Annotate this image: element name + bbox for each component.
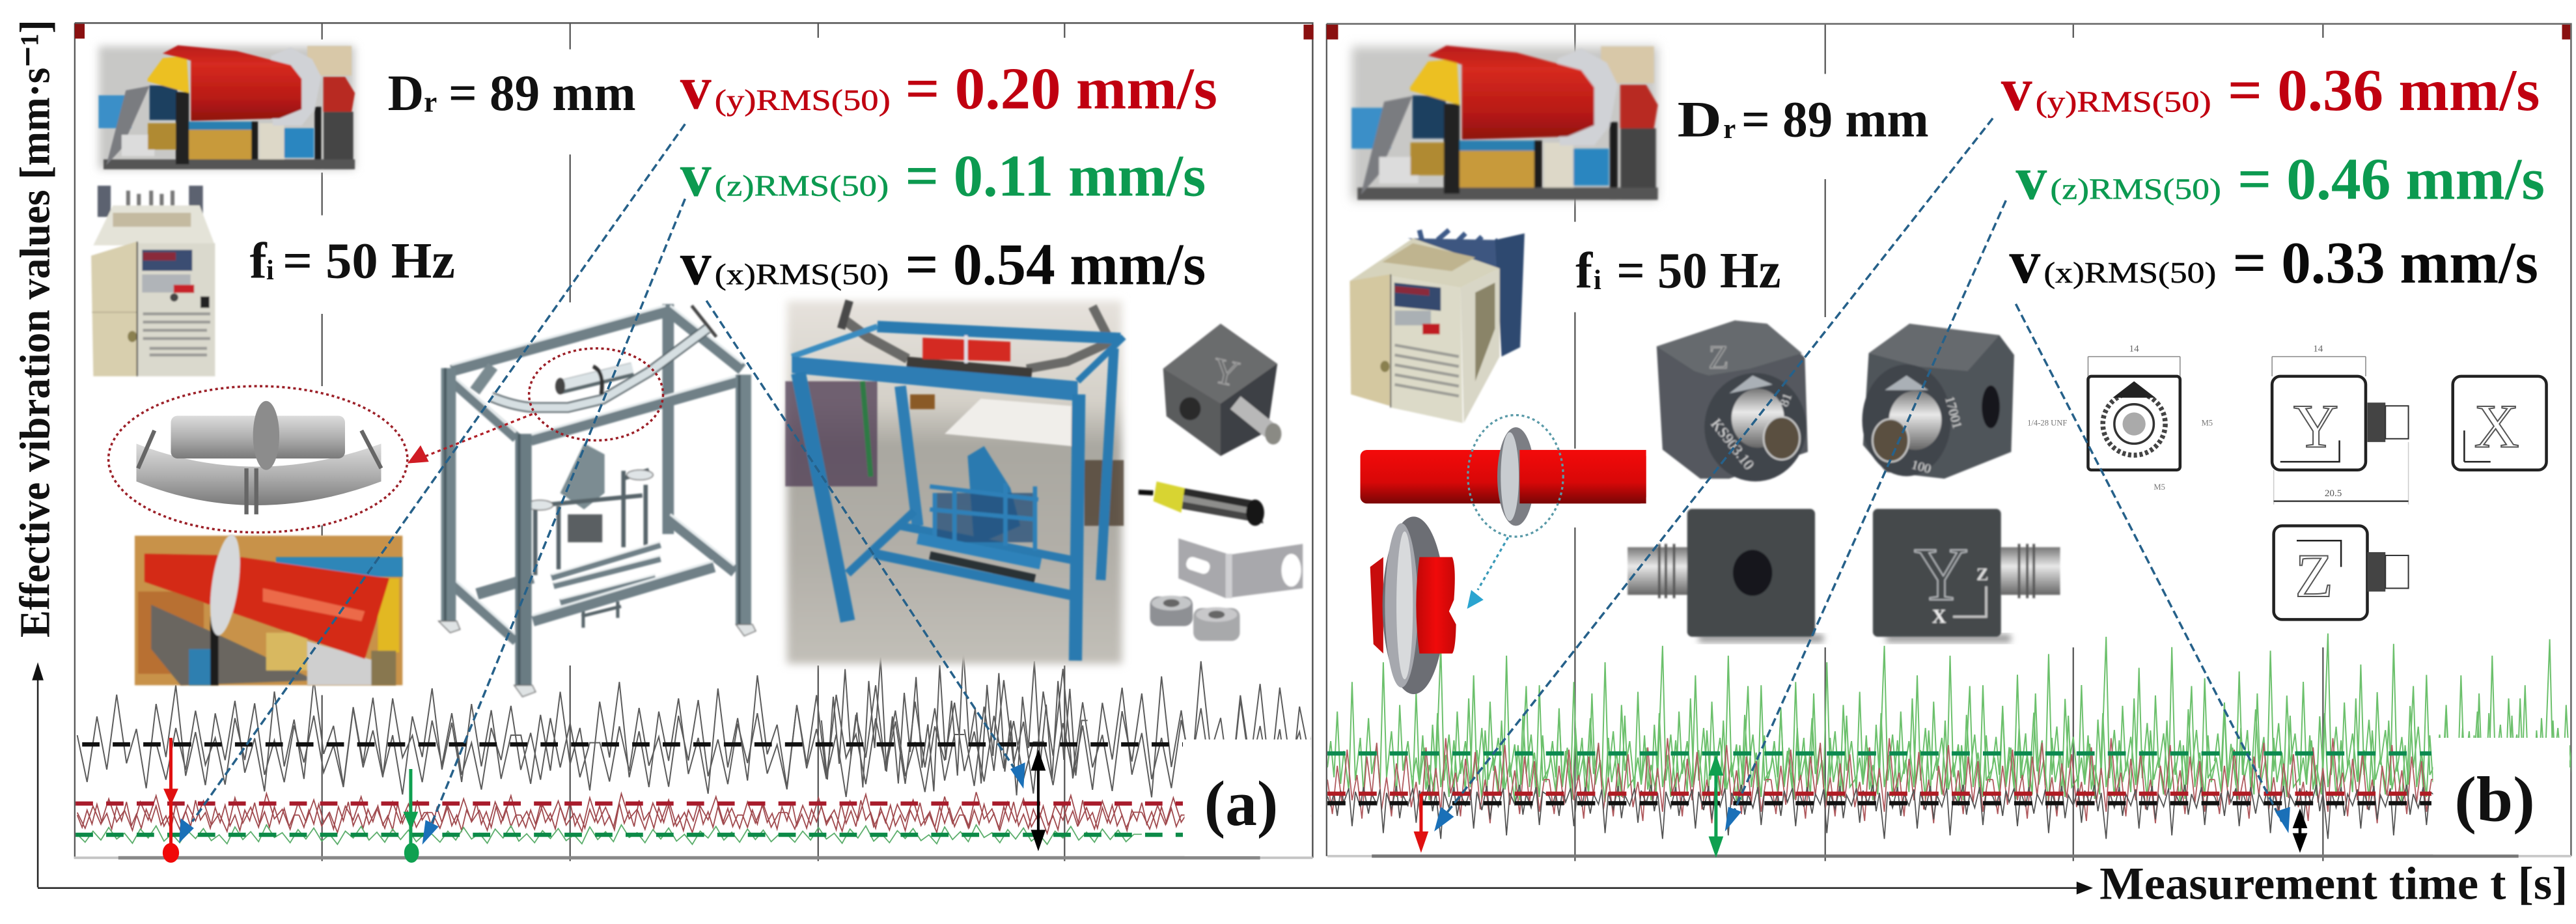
lower frame — [848, 511, 915, 574]
chart: vibration signals (a) — [77, 658, 1311, 845]
drawing: sensor connector view — [2027, 344, 2213, 492]
value: v(z) RMS (b): = 0.46 mm/s — [2237, 146, 2545, 212]
photo: roller close-up (a) — [135, 533, 402, 685]
y axis label: Effective vibration values [mm·s⁻¹] — [12, 20, 59, 637]
chart: vibration signals (b) — [1327, 634, 2576, 839]
corner mark — [75, 24, 85, 38]
label: inverter frequency (a): = 50 Hz — [283, 232, 455, 288]
value: v(z) RMS (a): v — [680, 140, 712, 209]
green marker arrow (a) — [404, 769, 419, 863]
photo: sensor cube left: Z — [1709, 339, 1728, 375]
icon: mounting bracket — [1178, 539, 1303, 598]
drawing: sensor connector view: 1/4-28 UNF — [2027, 419, 2067, 428]
drawing: Z side: Z — [2295, 541, 2333, 610]
panel: (b) — [1303, 24, 2576, 861]
red signal y — [1327, 738, 2436, 823]
leader lines (a) — [192, 124, 1017, 826]
red roller model — [1361, 427, 1646, 526]
dotted arrow to section — [1467, 537, 1508, 609]
leader arrowheads (b) — [1434, 807, 2290, 833]
value: v(y) RMS (a): (y)RMS(50) — [715, 84, 891, 117]
black double arrow (b) — [2293, 809, 2307, 853]
drawing: Y side: 20.5 — [2325, 488, 2342, 499]
drawing: X side: X — [2474, 391, 2519, 460]
rail highlights — [452, 305, 743, 565]
label: roller diameter (a): D — [388, 64, 424, 121]
arrow: zoom to idler model — [408, 414, 533, 464]
black signal x — [77, 658, 1311, 798]
value: v(y) RMS (a) — [680, 53, 1217, 122]
x axis arrow — [38, 882, 2093, 895]
label: inverter frequency (b): = 50 Hz — [1616, 242, 1781, 299]
icon: hex nuts — [1150, 596, 1240, 641]
value: v(z) RMS (b) — [2015, 143, 2545, 212]
value: v(y) RMS (b) — [2001, 55, 2540, 124]
photo: sensor face Y — [1873, 509, 2060, 643]
label: roller diameter (a): = 89 mm — [449, 64, 636, 121]
red marker arrow (a) — [163, 738, 179, 863]
machinery — [967, 446, 1020, 546]
drawing: sensor connector view: M5 — [2154, 483, 2165, 492]
label: inverter frequency (a): i — [266, 255, 274, 286]
value: v(y) RMS (b): v — [2001, 55, 2032, 124]
highlight ellipse with idler model — [109, 386, 408, 533]
red marker arrow (b) — [1414, 794, 1428, 853]
label: roller diameter (b): D — [1678, 91, 1722, 147]
value: v(x) RMS (b): (x)RMS(50) — [2043, 257, 2216, 289]
photo: sensor cube right — [1862, 324, 2014, 479]
icon: frequency inverter (a) — [91, 186, 215, 376]
label: inverter frequency (b): f — [1575, 242, 1593, 299]
mechanism — [561, 443, 605, 509]
drawing: sensor connector view: 14 — [2129, 344, 2139, 354]
leader arrowheads (a) — [179, 763, 1025, 845]
drawing: Y side: Y — [2293, 391, 2338, 460]
panel tag (a): (a) — [1204, 768, 1278, 839]
panel tag (b): (b) — [2454, 764, 2535, 835]
leader lines (b) — [1443, 119, 2282, 822]
front frame parts — [452, 380, 742, 641]
value: v(z) RMS (a): = 0.11 mm/s — [906, 143, 1206, 208]
photo: roller top-left (a) — [98, 46, 355, 169]
value: v(x) RMS (a) — [680, 229, 1206, 298]
green signal z — [77, 825, 1142, 845]
icon: triaxial sensor (a): Y — [1209, 351, 1243, 395]
drawing: Y side — [2272, 344, 2409, 505]
value: v(x) RMS (b): v — [2009, 227, 2040, 296]
value: v(y) RMS (b): = 0.36 mm/s — [2228, 57, 2540, 123]
background clutter — [785, 381, 878, 486]
x axis label: Measurement time t [s] — [2099, 858, 2568, 909]
photo: sensor cube left: 81 — [1777, 391, 1795, 409]
value: v(y) RMS (b): (y)RMS(50) — [2036, 86, 2211, 119]
value: v(z) RMS (a): (z)RMS(50) — [715, 169, 889, 202]
value: v(z) RMS (a) — [680, 140, 1206, 209]
value: v(x) RMS (a): v — [680, 229, 712, 298]
value: v(x) RMS (b) — [2009, 227, 2538, 296]
panel frame (a) — [74, 23, 1312, 861]
RMS dashed lines (a) — [76, 744, 1183, 835]
mask beside chart (a) — [1185, 740, 1311, 856]
highlight circle on frame — [529, 348, 663, 440]
photo: sensor cube right: 100 — [1910, 458, 1933, 477]
icon: frequency inverter (b) — [1350, 230, 1525, 423]
label: inverter frequency (a): f — [250, 232, 268, 288]
posts — [445, 368, 451, 621]
RMS dashed lines (b) — [1327, 753, 2431, 804]
green signal z — [1327, 634, 2576, 802]
photo: sensor cube left: KS903.10 — [1708, 416, 1757, 473]
value: v(y) RMS (a): = 0.20 mm/s — [906, 56, 1217, 122]
green double arrow (b) — [1709, 754, 1723, 858]
value: v(x) RMS (a): = 0.54 mm/s — [906, 232, 1206, 298]
rear frame parts — [452, 304, 742, 594]
roller section model — [1370, 516, 1456, 694]
photo: sensor cube right: 17001 — [1942, 395, 1964, 430]
value: v(z) RMS (b): (z)RMS(50) — [2050, 173, 2221, 205]
conveyor tube — [492, 329, 707, 408]
photo: sensor face with hole — [1627, 509, 1823, 643]
black signal x — [1327, 785, 2436, 839]
photo: sensor face Y: X — [1932, 605, 1946, 627]
top frame — [878, 326, 1120, 339]
panel frame (b) — [1327, 24, 2571, 861]
photo: sensor face Y: Y — [1914, 533, 1969, 617]
photo: roller top-left (b) — [1351, 46, 1658, 200]
value: v(y) RMS (a): v — [680, 53, 712, 122]
value: v(x) RMS (b): = 0.33 mm/s — [2233, 230, 2538, 296]
drawing: Y side: 14 — [2313, 344, 2323, 354]
icon: laser sensor — [1139, 481, 1264, 526]
panel: (a) — [74, 23, 1497, 863]
highlight ellipse on roller — [1468, 415, 1563, 537]
drawing: Z side — [2274, 526, 2409, 619]
value: v(z) RMS (b): v — [2015, 143, 2047, 212]
icon: triaxial sensor (a) — [1163, 324, 1281, 456]
mask beside chart (b) — [2433, 738, 2569, 854]
drawing: sensor connector view: M5 — [2202, 419, 2213, 428]
label: roller diameter (b): = 89 mm — [1741, 91, 1929, 147]
photo: test rig — [785, 301, 1124, 664]
black double arrow (a) — [1031, 749, 1046, 851]
3D model: test frame — [439, 304, 756, 697]
photo: sensor cube left — [1657, 320, 1808, 481]
value: v(x) RMS (a): (x)RMS(50) — [715, 259, 889, 291]
corner marks (b) — [1303, 25, 2570, 40]
label: roller diameter (b): r — [1723, 114, 1736, 145]
y axis arrow — [32, 662, 44, 888]
red signal y — [77, 792, 1497, 833]
roller — [561, 369, 633, 387]
photo: sensor face Y: Z — [1976, 565, 1988, 585]
label: inverter frequency (b): i — [1594, 265, 1601, 296]
label: roller diameter (a): r — [424, 86, 437, 119]
tube — [843, 319, 907, 359]
drawing: X side — [2453, 376, 2547, 470]
legs — [798, 373, 848, 621]
